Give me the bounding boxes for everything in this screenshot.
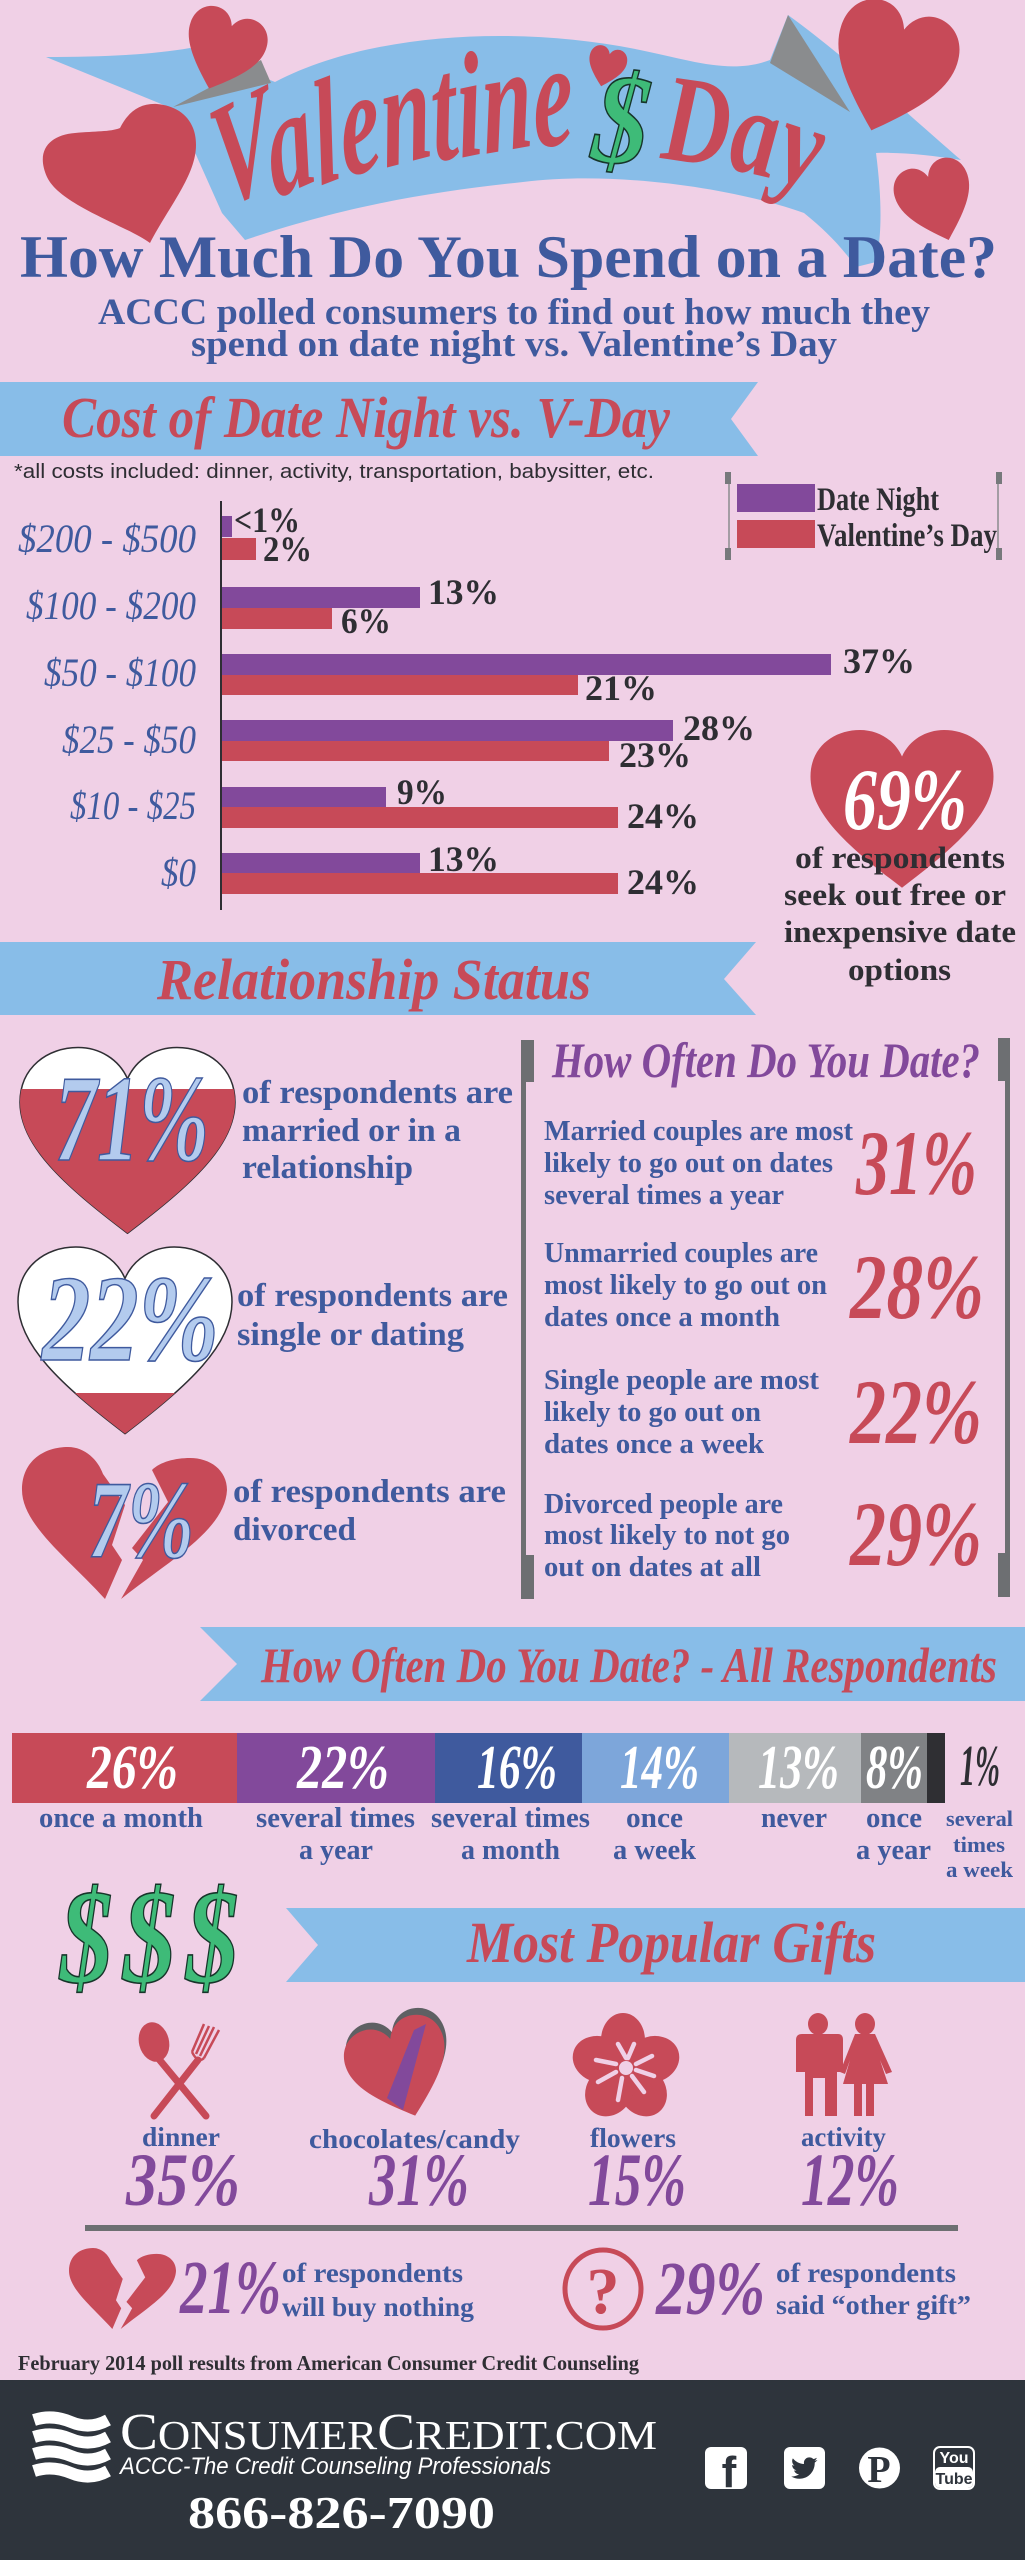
icon: three dollar signs	[58, 1863, 239, 2012]
bar chart: 21%	[585, 668, 657, 708]
heart stat: 22 percent: 22%	[40, 1250, 219, 1387]
stat: unmarried	[544, 1236, 984, 1338]
stat: will buy nothing: 21%	[179, 2246, 281, 2330]
gift: chocolates: chocolates/candy	[309, 2124, 521, 2154]
bar chart: $25 - $50	[62, 717, 196, 762]
heart stat: 71 percent: 71%	[55, 1050, 209, 1187]
heart stat: 22 percent	[18, 1247, 508, 1434]
bar chart: $50 - $100	[44, 650, 196, 695]
callout: 69 percent: inexpensive date	[784, 914, 1016, 949]
bar chart: 6%	[341, 601, 391, 641]
icon: three dollar signs: $	[184, 1863, 239, 2012]
stacked bar: 8%	[866, 1734, 923, 1802]
stat: single: 22%	[848, 1361, 982, 1463]
dollar sign: $	[585, 45, 657, 195]
stacked bar: a month	[461, 1835, 560, 1866]
callout: 69 percent: 69%	[843, 752, 967, 849]
stat: single: likely to go out on	[544, 1396, 761, 1428]
bracket right	[998, 1038, 1010, 1597]
callout: 69 percent: seek out free or	[784, 877, 1006, 912]
icon: pinterest: P	[867, 2449, 891, 2491]
stat: married: Married couples are most	[544, 1115, 853, 1147]
gift: flowers: 15%	[588, 2139, 686, 2222]
heart: large left	[43, 104, 196, 243]
heading: relationship status: Relationship Status	[156, 947, 591, 1012]
gift: flowers	[567, 2013, 686, 2222]
gift: chocolates	[309, 2001, 521, 2222]
callout: 69 percent	[784, 730, 1016, 987]
ribbon fold left	[173, 60, 271, 107]
banner: all respondents	[200, 1627, 1025, 1701]
subtitle heading: How Much Do You Spend on a Date?	[20, 224, 997, 290]
heart stat: 71 percent: relationship	[242, 1150, 413, 1186]
stat: married: likely to go out on dates	[544, 1147, 833, 1179]
icon: flower	[567, 2013, 685, 2126]
stat: single: Single people are most	[544, 1364, 819, 1396]
bar chart: 28%	[683, 708, 755, 748]
bar chart: 13%	[428, 839, 499, 879]
panel: cost of date night	[0, 382, 758, 483]
intro text: spend on date night vs. Valentine’s Day	[191, 324, 838, 365]
title ribbon graphic	[43, 0, 985, 267]
stat: divorced: out on dates at all	[544, 1551, 761, 1583]
stat: married: 31%	[855, 1112, 977, 1214]
heart stat: 22 percent: single or dating	[237, 1317, 465, 1353]
heading: Valentine's Day: Day	[657, 48, 836, 218]
banner: cost heading	[0, 382, 758, 456]
gift: dinner: dinner	[142, 2122, 220, 2152]
bar chart: 9%	[397, 772, 447, 812]
icon: three dollar signs: $	[121, 1863, 176, 2012]
stat: divorced: 29%	[848, 1483, 982, 1585]
stat: divorced: Divorced people are	[544, 1488, 783, 1520]
heart: lower right	[888, 152, 985, 252]
gift: dinner	[125, 2019, 240, 2222]
bar chart: 24%	[627, 862, 699, 902]
icon: question mark	[565, 2250, 641, 2328]
stat: unmarried: most likely to go out on	[544, 1269, 827, 1301]
stat: other gift: 29%	[655, 2247, 765, 2331]
stacked bar: a week	[613, 1835, 696, 1866]
stacked bar: several	[946, 1806, 1013, 1831]
stacked bar: 16%	[477, 1734, 557, 1802]
stacked bar: several times	[256, 1803, 415, 1834]
stat: married	[544, 1112, 977, 1214]
stat: other gift	[565, 2247, 971, 2331]
stacked bar: never	[761, 1803, 827, 1834]
stat: married: several times a year	[544, 1179, 784, 1211]
bar chart: 23%	[619, 735, 691, 775]
divider	[85, 2225, 958, 2231]
heart stat: 71 percent: married or in a	[242, 1113, 461, 1149]
stacked bar: a week	[946, 1857, 1014, 1882]
icon: question mark: ?	[586, 2255, 620, 2328]
stat: will buy nothing: of respondents	[282, 2258, 463, 2288]
panel: most popular gifts	[286, 1908, 1025, 1982]
stacked bar: 13%	[758, 1734, 839, 1802]
stat: unmarried: 28%	[848, 1236, 984, 1338]
heart stat: 7 percent	[22, 1447, 506, 1599]
icon: youtube: You	[939, 2450, 969, 2467]
phone number: 866-826-7090	[188, 2487, 495, 2538]
legend	[725, 472, 1002, 560]
heart stat: 71 percent: of respondents are	[242, 1075, 513, 1111]
stat: divorced: most likely to not go	[544, 1519, 790, 1551]
intro text	[98, 292, 931, 365]
bar chart: $0	[161, 850, 196, 895]
heading: Valentine's Day	[199, 9, 836, 241]
heart stat: 7 percent: of respondents are	[233, 1474, 506, 1510]
stacked bar: a year	[299, 1835, 373, 1866]
icon: fork and spoon	[135, 2019, 219, 2116]
stat: single	[544, 1361, 982, 1463]
bar chart: $200 - $500	[18, 516, 196, 561]
stat: unmarried: Unmarried couples are	[544, 1237, 818, 1269]
stacked bar: once	[866, 1803, 922, 1834]
bar chart: $100 - $200	[26, 583, 196, 628]
callout: 69 percent: options	[848, 952, 951, 987]
gift: activity: 12%	[801, 2139, 899, 2222]
source note: February 2014 poll results from American Consumer Credit Counseling	[18, 2351, 639, 2375]
icon: broken heart	[69, 2248, 176, 2329]
icon: heart box	[337, 2001, 466, 2131]
callout: 69 percent: of respondents	[795, 840, 1005, 875]
stacked bar: once	[626, 1803, 683, 1834]
banner: relationship	[0, 942, 756, 1015]
intro text: ACCC polled consumers to find out how much they	[98, 292, 931, 333]
bar chart: 37%	[843, 641, 915, 681]
icon: twitter	[784, 2447, 825, 2489]
stat: will buy nothing: will buy nothing	[282, 2292, 475, 2322]
footnote: costs: *all costs included: dinner, activity, transportation, babysitter, etc.	[14, 461, 654, 483]
footer	[0, 2380, 1025, 2560]
icon: pinterest	[859, 2448, 900, 2491]
heart stat: 71 percent	[20, 1048, 513, 1233]
panel: how often do you date	[521, 1032, 1010, 1599]
stat: divorced	[544, 1483, 982, 1585]
stacked bar	[12, 1733, 1014, 1882]
stacked bar: several times	[431, 1803, 590, 1834]
icon: three dollar signs: $	[58, 1863, 113, 2012]
stat: single: dates once a week	[544, 1428, 765, 1460]
heart: top right	[813, 0, 969, 149]
icon: facebook	[705, 2447, 747, 2497]
bar chart: $10 - $25	[70, 783, 196, 828]
gift: activity: activity	[801, 2122, 886, 2152]
bar chart: 24%	[627, 796, 699, 836]
heading: cost of date night: Cost of Date Night vs. V-Day	[62, 385, 670, 450]
gift: flowers: flowers	[590, 2123, 676, 2153]
stat: unmarried: dates once a month	[544, 1301, 780, 1333]
bar chart: 2%	[263, 529, 312, 569]
stacked bar: 22%	[296, 1734, 389, 1802]
stat: other gift: said “other gift”	[776, 2290, 971, 2320]
heart stat: 7 percent: divorced	[233, 1512, 356, 1548]
panel: all respondents	[200, 1627, 1025, 1701]
panel: relationship status	[0, 942, 756, 1015]
stacked bar: once a month	[39, 1803, 203, 1834]
brand name: CONSUMER CREDIT.COM	[120, 2404, 657, 2461]
heart stat: 22 percent: of respondents are	[237, 1278, 508, 1314]
icon: couple	[796, 2013, 892, 2116]
gift: activity	[796, 2013, 899, 2222]
heading: gifts: Most Popular Gifts	[466, 1910, 876, 1975]
heart stat: 7 percent: 7%	[88, 1459, 194, 1581]
heading: Valentine's Day: Valentine	[199, 9, 577, 241]
stat: will buy nothing	[69, 2246, 475, 2330]
stacked bar: times	[953, 1832, 1005, 1857]
icon: youtube	[934, 2447, 974, 2489]
bar chart	[18, 500, 915, 910]
bar chart: 13%	[428, 572, 499, 612]
heart: small centre	[583, 43, 630, 91]
legend: Date Night	[817, 482, 939, 518]
icon: facebook: f	[722, 2448, 737, 2497]
stat: other gift: of respondents	[776, 2258, 956, 2288]
icon: youtube: Tube	[935, 2471, 973, 2488]
banner: gifts	[286, 1908, 1025, 1982]
icon: logo waves	[34, 2417, 108, 2477]
gift: dinner: 35%	[125, 2139, 240, 2222]
bracket left	[521, 1040, 534, 1599]
tagline: ACCC-The Credit Counseling Professionals	[118, 2453, 551, 2480]
gift: chocolates: 31%	[368, 2139, 469, 2222]
ribbon fold right	[770, 15, 850, 112]
stacked bar: 14%	[620, 1734, 699, 1802]
heart: top left	[171, 0, 274, 102]
stacked bar: a year	[856, 1835, 931, 1866]
bar chart: <1%	[234, 500, 300, 540]
stacked bar: 26%	[86, 1734, 178, 1802]
